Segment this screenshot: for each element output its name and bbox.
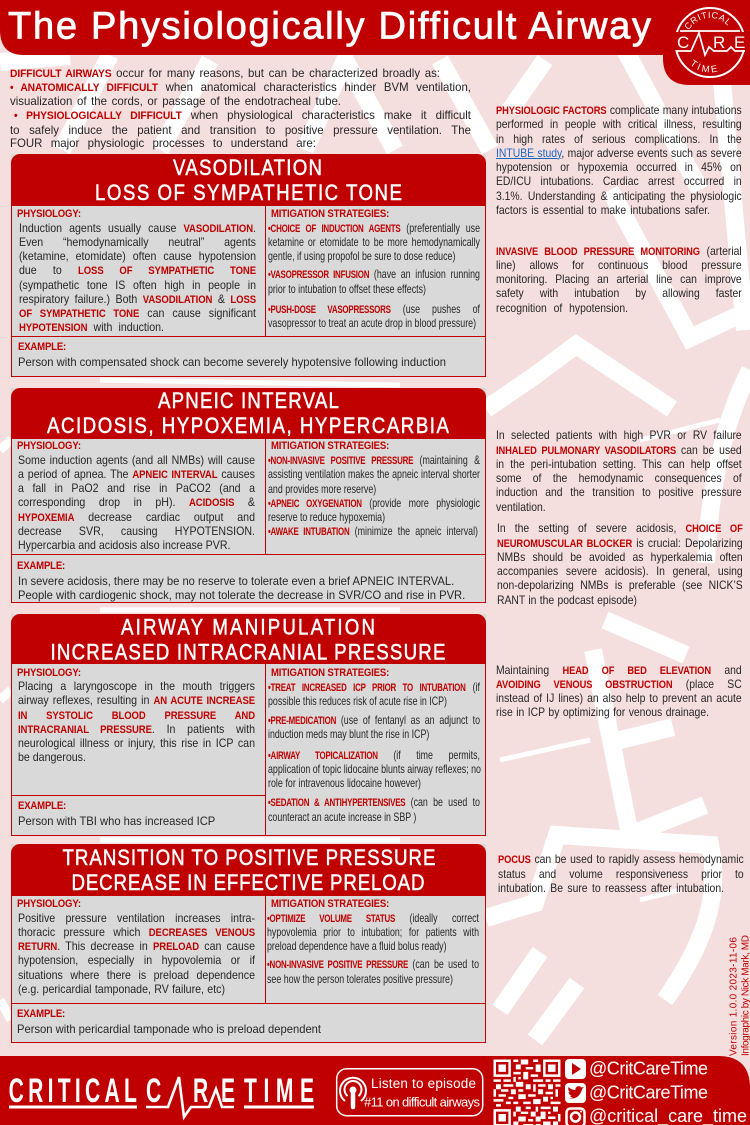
icon: Critical Care Time logo: R [713, 33, 725, 52]
physiology cell: respiratory failure.) Both VASODILATION & LOSS [18, 292, 255, 306]
mitigation cell: MITIGATION STRATEGIES: [271, 440, 389, 452]
side note: choice of neuromuscular blocker: NMBs should be avoided as hyperkalemia often [496, 550, 742, 564]
footer logo [9, 1071, 314, 1117]
mitigation cell: preload dependence have a fluid bolus ready) [267, 939, 447, 953]
physiology cell: Placing a laryngoscope in the mouth triggers [18, 679, 255, 693]
mitigation cell [265, 205, 486, 337]
side note: choice of neuromuscular blocker: RANT in the podcast episode) [496, 593, 636, 607]
heading: transition to positive pressure [10, 844, 486, 895]
side note: POCUS [498, 852, 744, 895]
mitigation cell: •OPTIMIZE VOLUME STATUS (ideally correct [267, 910, 479, 924]
side note: invasive blood pressure monitoring: safety with intubation by allowing faster [496, 286, 742, 300]
side note: invasive blood pressure monitoring: line) allows for continuous blood pressure [496, 258, 742, 272]
mitigation cell: MITIGATION STRATEGIES: [270, 898, 389, 910]
heading: airway manipulation: INCREASED INTRACRANIAL PRESSURE [50, 641, 445, 664]
mitigation cell: •NON-INVASIVE POSITIVE PRESSURE (maintaining & [268, 453, 479, 467]
side note: invasive blood pressure monitoring: monitoring. Placing an arterial line can improve [496, 272, 742, 286]
side note: POCUS: intubation. Be sure to reassess after intubation. [498, 881, 724, 895]
footer logo: TIME [244, 1071, 314, 1109]
side note: inhaled pulmonary vasodilators: some of the hemodynamic consequences of [496, 471, 742, 485]
physiology cell: PHYSIOLOGY: [17, 440, 81, 452]
mitigation cell: counteract an acute increase in SBP ) [268, 810, 416, 824]
physiology cell: thoracic pressure which DECREASES VENOUS [18, 925, 254, 939]
icon: twitter [565, 1083, 586, 1103]
physiology cell: HYPOTENSION with induction. [18, 320, 163, 334]
icon: instagram [566, 1108, 584, 1125]
physiology cell: IN SYSTOLIC BLOOD PRESSURE AND [18, 710, 255, 722]
physiology cell [11, 438, 266, 555]
heading: vasodilation: LOSS OF SYMPATHETIC TONE [95, 182, 402, 205]
mitigation cell [265, 663, 486, 836]
intro text: to safely induce the patient and transition to positive pressure ventilation. The [10, 122, 470, 136]
heading: apneic interval: APNEIC INTERVAL [158, 390, 339, 413]
intro text: visualization of the cords, or passage of the endotracheal tube. [10, 94, 340, 108]
mitigation cell: •AIRWAY TOPICALIZATION (if time permits, [268, 748, 479, 762]
mitigation cell [265, 438, 486, 555]
physiology cell: RETURN. This decrease in PRELOAD can cause [18, 939, 254, 953]
physiology cell: INTRACRANIAL PRESSURE. In patients with [18, 722, 255, 736]
side note: physiologic factors: in high rates of serious complications. In the [496, 132, 742, 146]
version and author credit [728, 935, 750, 1056]
example cell: Person with TBI who has increased ICP [18, 814, 215, 828]
side note: inhaled pulmonary vasodilators [496, 428, 742, 514]
mitigation cell: •PUSH-DOSE VASOPRESSORS (use pushes of [268, 302, 479, 316]
mitigation cell: see how the person tolerates positive pressure) [267, 972, 453, 986]
side note: POCUS: status and volume responsiveness prior to [498, 867, 744, 881]
physiology cell: Positive pressure ventilation increases intra- [18, 910, 254, 924]
mitigation cell: reserve to reduce hypoxemia) [268, 510, 385, 524]
icon: youtube [565, 1059, 586, 1079]
footer logo: C [146, 1071, 161, 1109]
footer [0, 1056, 750, 1125]
physiology cell: be dangerous. [18, 750, 86, 764]
physiology cell: hypotension, especially in hypovolemia or if [18, 953, 254, 967]
mitigation cell: vasopressor to treat an acute drop in blood pressure) [268, 316, 476, 330]
mitigation cell: •APNEIC OXYGENATION (provide more physiologic [268, 496, 479, 510]
mitigation cell: •AWAKE INTUBATION (minimize the apneic interval) [268, 524, 478, 538]
mitigation cell: gentle, if using propofol be sure to dose reduce) [268, 249, 455, 263]
physiology cell: Hypercarbia and acidosis also increase PVR. [18, 538, 230, 552]
physiology cell: HYPOXEMIA decrease cardiac output and [18, 510, 255, 524]
physiology cell: PHYSIOLOGY: [17, 666, 81, 678]
example cell [11, 795, 266, 836]
episode button [337, 1069, 483, 1116]
physiology cell: Even “hemodynamically neutral” agents [18, 235, 255, 249]
panel: airway manipulation [11, 614, 486, 836]
episode button: #11 on difficult airways [364, 1094, 480, 1110]
mitigation cell: •SEDATION & ANTIHYPERTENSIVES (can be used to [268, 795, 479, 809]
intro text: • PHYSIOLOGICALLY DIFFICULT when physiological characteristics make it difficult [14, 108, 470, 122]
physiology cell: due to LOSS OF SYMPATHETIC TONE [18, 263, 255, 277]
panel: vasodilation [11, 154, 486, 377]
social handles: @CritCareTime [589, 1082, 708, 1102]
mitigation cell: induction meds may blunt the rise in ICP) [268, 727, 429, 741]
side note: invasive blood pressure monitoring: INVASIVE BLOOD PRESSURE MONITORING (arterial [496, 244, 742, 258]
side note: invasive blood pressure monitoring [496, 244, 742, 315]
example cell: In severe acidosis, there may be no reserve to tolerate even a brief APNEIC INTERVAL. [18, 574, 454, 588]
mitigation cell: •PRE-MEDICATION (use of fentanyl as an adjunct to [268, 713, 479, 727]
side note: inhaled pulmonary vasodilators: In selected patients with high PVR or RV failure [496, 428, 742, 442]
mitigation cell [264, 895, 486, 1004]
physiology cell: airway reflexes, resulting in AN ACUTE INCREASE [18, 693, 255, 707]
side note: invasive blood pressure monitoring: recognition of hypotension. [496, 301, 628, 315]
footer logo: E [221, 1071, 235, 1109]
physiology cell: PHYSIOLOGY: [17, 208, 81, 220]
side note: head of bed elevation: rise in ICP by optimizing for venous drainage. [496, 705, 709, 719]
heading: airway manipulation [11, 614, 486, 664]
intro text: • ANATOMICALLY DIFFICULT when anatomical characteristics hinder BVM ventilation, [10, 80, 470, 94]
physiology cell: a fall in PaO2 and rise in PaCO2 (and a [18, 481, 255, 495]
side note: physiologic factors: performed in people with critical illness, resulting [496, 117, 742, 131]
social handles [589, 1058, 747, 1125]
example cell: Person with compensated shock can become severely hypotensive following induction [18, 355, 445, 369]
side note: inhaled pulmonary vasodilators: induction and the transition to positive pressure [496, 485, 742, 499]
side note: head of bed elevation: instead of IJ lines) an also help to prevent an acute [496, 691, 742, 705]
physiology cell: Induction agents usually cause VASODILATION. [18, 220, 255, 234]
physiology cell: neurological illness or injury, this rise in ICP can [18, 736, 255, 750]
physiology cell: Some induction agents (and all NMBs) will cause [18, 452, 255, 466]
physiology cell: corresponding drop in pH). ACIDOSIS & [18, 495, 255, 509]
icon: Critical Care Time logo: C [677, 33, 689, 52]
panel: transition to positive pressure [10, 844, 486, 1043]
icon: Critical Care Time logo: E [734, 33, 745, 52]
mitigation cell: •VASOPRESSOR INFUSION (have an infusion running [268, 267, 479, 281]
mitigation cell: •TREAT INCREASED ICP PRIOR TO INTUBATION (if [268, 680, 480, 694]
QR code [494, 1060, 560, 1125]
side note: head of bed elevation: AVOIDING VENOUS OBSTRUCTION (place SC [496, 677, 742, 691]
side note: choice of neuromuscular blocker: NEUROMUSCULAR BLOCKER is crucial: Depolarizing [496, 536, 742, 550]
example cell: EXAMPLE: [17, 1008, 65, 1020]
mitigation cell: ketamine or etomidate to be more hemodynamically [268, 235, 479, 249]
physiology cell: situations where there is preload dependence [18, 968, 254, 982]
example cell: EXAMPLE: [18, 341, 66, 353]
side note: head of bed elevation [496, 663, 742, 719]
mitigation cell: and provides more reserve) [268, 482, 376, 496]
side note: choice of neuromuscular blocker: non-depolarizing NMBs is preferable (see NICK’S [496, 578, 742, 592]
side note: inhaled pulmonary vasodilators: in the peri-intubation setting. This can help offset [496, 457, 742, 471]
physiology cell [11, 205, 266, 337]
footer logo: R [193, 1071, 208, 1109]
side note: choice of neuromuscular blocker: In the setting of severe acidosis, CHOICE OF [496, 521, 742, 535]
mitigation cell: application of topic lidocaine blunts airway reflexes; no [268, 762, 480, 776]
physiology cell: (e.g. pericardial tamponade, RV failure, etc) [18, 982, 224, 996]
side note: physiologic factors: ED/ICU intubations. Cardiac arrest occurred in [496, 174, 742, 188]
physiology cell: (sympathetic tone IS often high in people in [18, 278, 255, 292]
mitigation cell: role for intravenous lidocaine however) [268, 776, 420, 790]
panel: apneic interval [11, 388, 486, 603]
example cell [10, 1003, 486, 1043]
heading: transition to positive pressure: TRANSITION TO POSITIVE PRESSURE [62, 847, 435, 870]
mitigation cell: •CHOICE OF INDUCTION AGENTS (preferentially use [268, 220, 479, 234]
side note: physiologic factors: hypotension or hypoxemia occurred in 45% on [496, 160, 742, 174]
icon: podcast [340, 1078, 366, 1107]
intro text: FOUR major physiologic processes to understand are: [10, 136, 315, 150]
physiology cell [10, 895, 266, 1004]
side note: head of bed elevation: Maintaining HEAD OF BED ELEVATION and [496, 663, 742, 677]
physiology cell: PHYSIOLOGY: [16, 898, 80, 910]
side note: physiologic factors: PHYSIOLOGIC FACTORS complicate many intubations [496, 103, 742, 117]
mitigation cell: MITIGATION STRATEGIES: [271, 666, 389, 678]
heading: vasodilation [11, 154, 486, 205]
side note: choice of neuromuscular blocker: accompanies severe acidosis). In general, using [496, 564, 742, 578]
side note: physiologic factors: factors is essential to make intubations safer. [496, 203, 710, 217]
footer logo: CRITICAL [9, 1071, 137, 1109]
physiology cell: a period of apnea. The APNEIC INTERVAL causes [18, 467, 255, 481]
physiology cell: decrease SVR, causing HYPOTENSION. [18, 524, 255, 538]
example cell [11, 554, 486, 603]
heading: airway manipulation: AIRWAY MANIPULATION [121, 616, 375, 639]
heading: vasodilation: VASODILATION [173, 157, 322, 180]
example cell: People with cardiogenic shock, may not tolerate the decrease in SVR/CO and rise in PVR. [18, 588, 465, 602]
example cell: EXAMPLE: [17, 560, 65, 572]
side note: inhaled pulmonary vasodilators: ventilation. [496, 500, 546, 514]
icon: Critical Care Time logo: CRITICAL [685, 12, 730, 29]
mitigation cell: •NON-INVASIVE POSITIVE PRESSURE (can be used to [267, 957, 479, 971]
example cell: Person with pericardial tamponade who is preload dependent [17, 1022, 321, 1036]
mitigation cell: prior to intubation to offset these effects) [268, 282, 425, 296]
side note: physiologic factors [496, 103, 742, 217]
episode button: Listen to episode [371, 1076, 476, 1091]
physiology cell: (ketamine, etomidate) often cause hypotension [18, 249, 255, 263]
side note: choice of neuromuscular blocker [496, 521, 742, 607]
side note: inhaled pulmonary vasodilators: INHALED PULMONARY VASODILATORS can be used [496, 443, 742, 457]
physiology cell [11, 663, 266, 796]
example cell [11, 336, 486, 377]
icon: Critical Care Time logo [675, 7, 745, 78]
side note: POCUS: POCUS can be used to rapidly assess hemodynamic [498, 852, 744, 866]
heading: apneic interval [11, 388, 486, 438]
physiology cell: OF SYMPATHETIC TONE can cause significant [18, 306, 255, 320]
side note: physiologic factors: INTUBE study, major adverse events such as severe [496, 146, 742, 160]
example cell: EXAMPLE: [18, 800, 66, 812]
title banner [0, 0, 750, 85]
heading: apneic interval: ACIDOSIS, HYPOXEMIA, HYPERCARBIA [47, 415, 449, 438]
intro text [10, 66, 471, 150]
intro text: DIFFICULT AIRWAYS occur for many reasons, but can be characterized broadly as: [10, 66, 439, 80]
mitigation cell: hypovolemia prior to intubation; for patients with [267, 925, 479, 939]
social handles: @CritCareTime [589, 1058, 708, 1078]
side note: physiologic factors: 3.1%. Understanding & anticipating the physiologic [496, 188, 742, 202]
mitigation cell: possible this reduces risk of acute rise in ICP) [268, 694, 447, 708]
version and author credit: Version 1.0.0 2023-11-06 [728, 937, 740, 1056]
mitigation cell: MITIGATION STRATEGIES: [271, 208, 389, 220]
mitigation cell: assisting ventilation makes the apneic interval shorter [268, 467, 479, 481]
icon: Critical Care Time logo: TIME [692, 59, 718, 72]
title: The Physiologically Difficult Airway [8, 6, 651, 48]
heading: transition to positive pressure: DECREASE IN EFFECTIVE PRELOAD [71, 872, 424, 895]
